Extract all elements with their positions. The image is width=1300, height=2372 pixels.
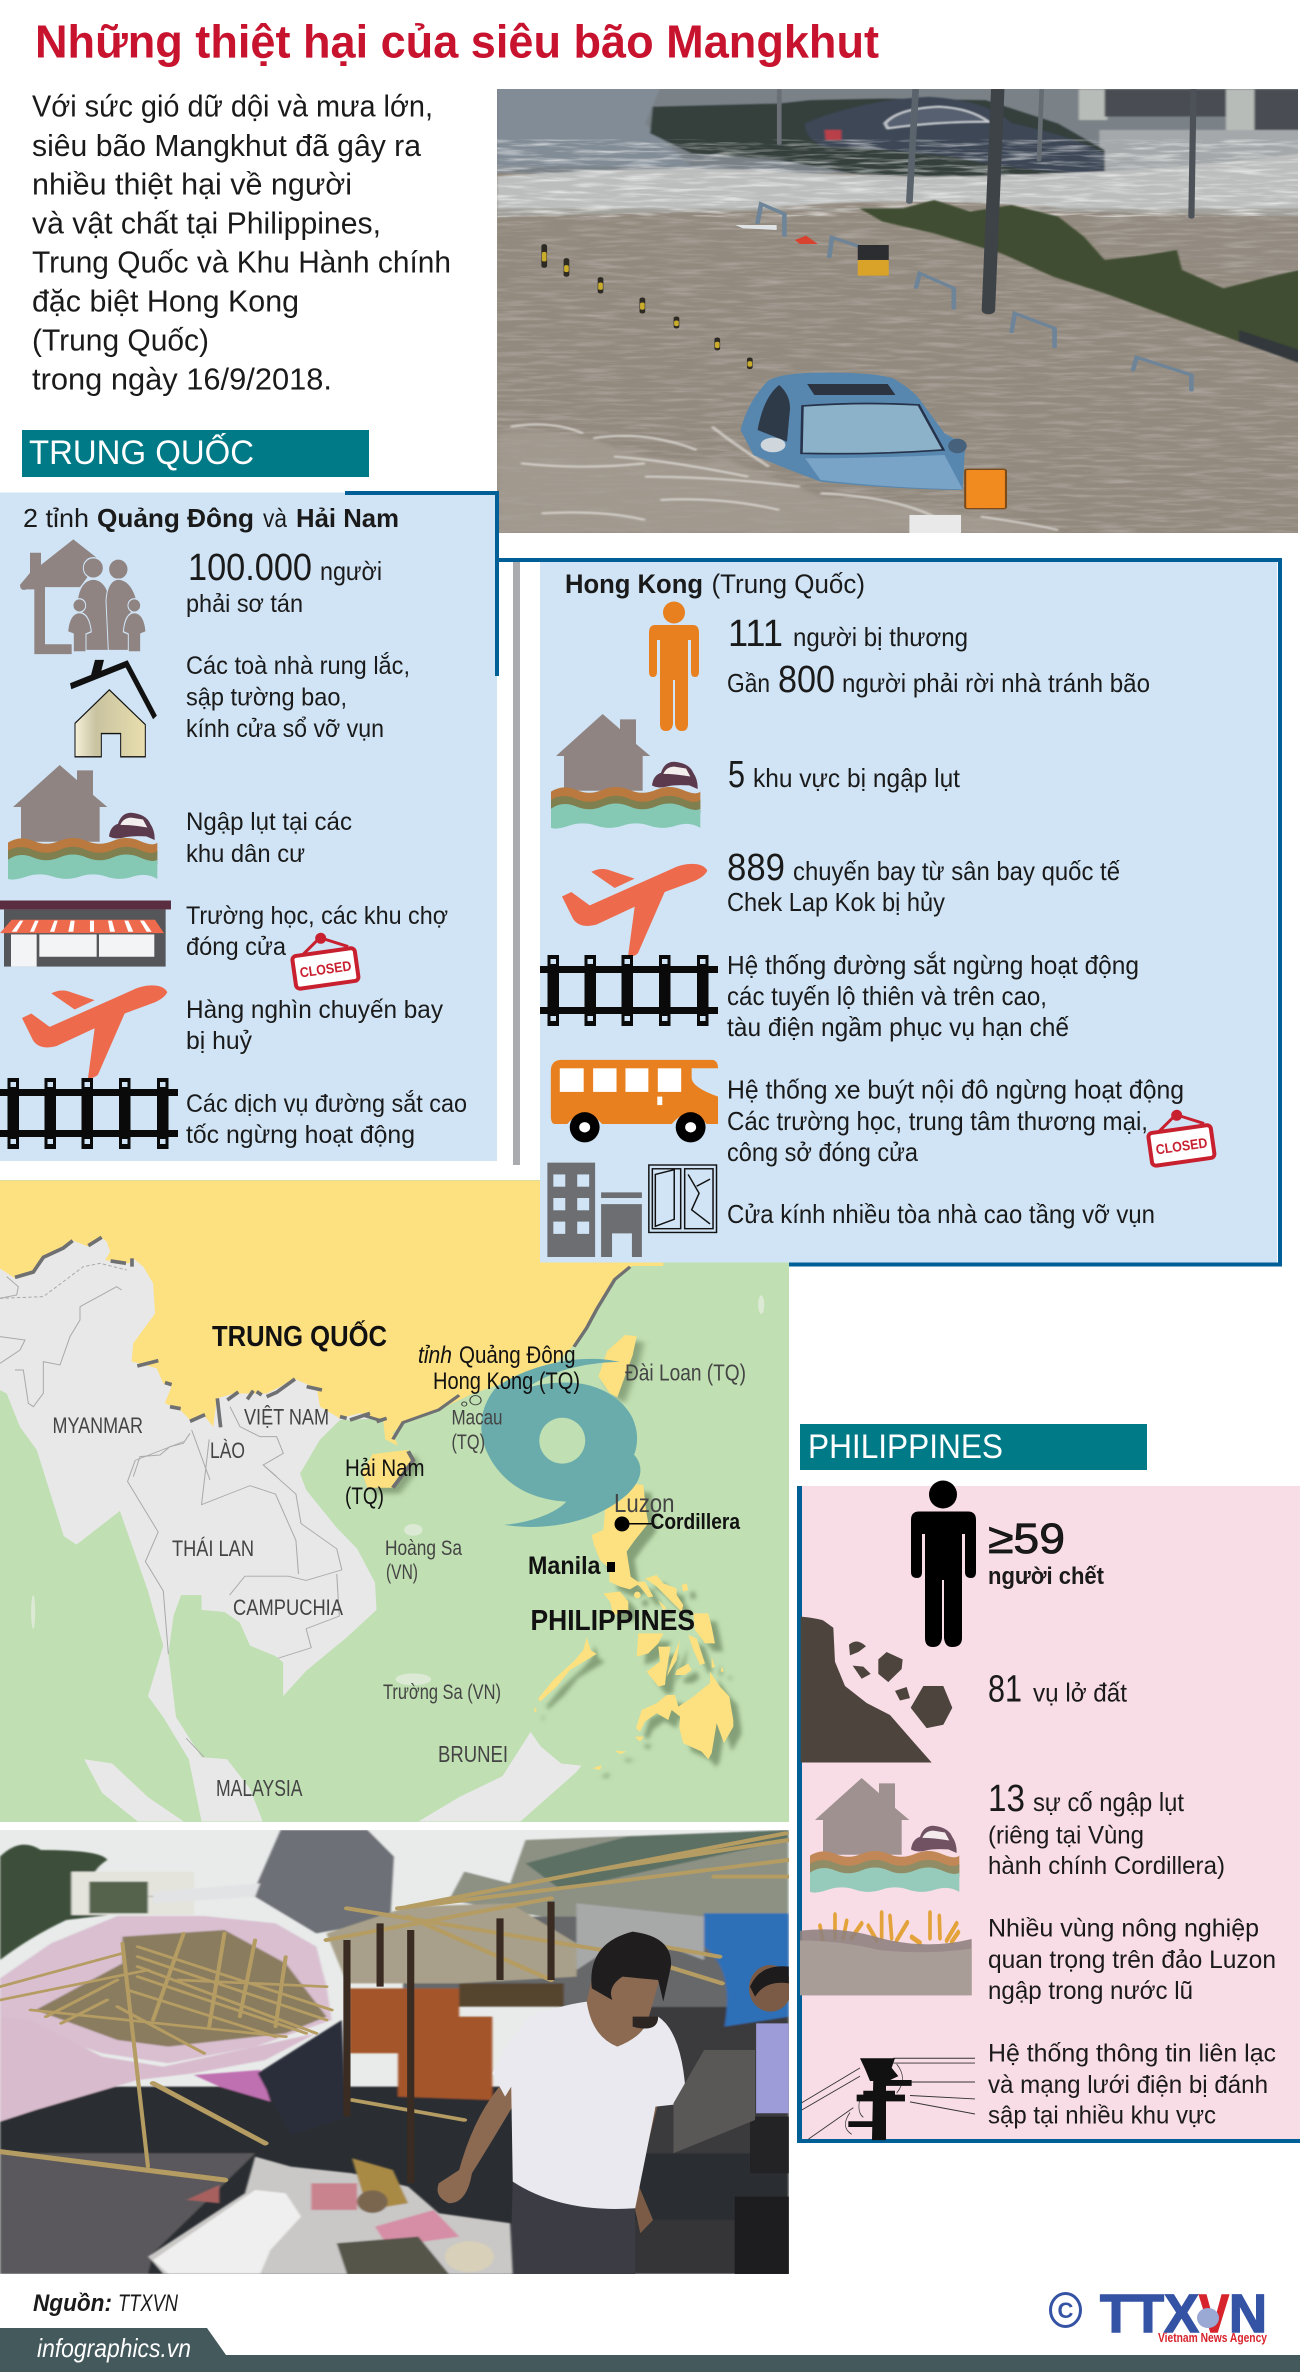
- icon: closed sign: [1145, 1105, 1215, 1166]
- man: [437, 1932, 686, 2274]
- text: communications and power: và mạng lưới điện bị đánh: [988, 2071, 1268, 2099]
- text: rail services: [186, 1089, 467, 1149]
- intro text: nhiều thiệt hại về người: [32, 166, 352, 202]
- text: buses and closures: Các trường học, trung tâm thương mại,: [727, 1106, 1148, 1136]
- icon: landslide: [801, 1617, 952, 1763]
- icon: evacuated family and house: [20, 539, 146, 654]
- map labels: VIỆT NAM: [244, 1404, 329, 1430]
- map labels: Hong Kong (TQ): [433, 1368, 580, 1395]
- text: flooding: [186, 808, 352, 868]
- island: Taiwan: [598, 1335, 637, 1397]
- logo: TTXVN: TTX: [1100, 2284, 1199, 2344]
- text: buses and closures: Hệ thống xe buýt nội đô ngừng hoạt động: [727, 1074, 1184, 1104]
- text: flooding: khu dân cư: [186, 840, 305, 868]
- icon: closed sign: CLOSED: [1155, 1134, 1208, 1157]
- map labels: (TQ): [452, 1431, 485, 1454]
- stat: 111 injured, 800 evacuated: người phải rời nhà tránh bão: [842, 668, 1150, 698]
- land: Southeast Asia mainland: [0, 1212, 388, 1822]
- map labels: Cordillera: [650, 1509, 741, 1534]
- source credit: Nguồn:: [33, 2290, 112, 2317]
- map: South China Sea region: [0, 1180, 789, 1822]
- logo: TTXVN: Vietnam News Agency: [1158, 2331, 1267, 2345]
- marker: Manila: [607, 1562, 615, 1572]
- text: rail services: tốc ngừng hoạt động: [186, 1121, 415, 1149]
- map labels: Manila: [528, 1552, 602, 1580]
- Philippines shadow: [542, 1490, 741, 1778]
- stat: 889 flights cancelled: Chek Lap Kok bị hủy: [727, 887, 945, 917]
- stat: 889 flights cancelled: 889: [727, 847, 785, 889]
- panel heading: Quảng Đông: [97, 503, 254, 533]
- section header: Trung Quốc: [22, 430, 369, 477]
- intro text: đặc biệt Hong Kong: [32, 284, 299, 318]
- island: Hainan: [362, 1450, 413, 1488]
- panel: mainland China impacts: [0, 492, 497, 1161]
- source credit: TTXVN: [118, 2290, 179, 2317]
- panel heading: [565, 569, 865, 599]
- icon: flooded farmland: [800, 1913, 972, 1995]
- stat: 111 injured, 800 evacuated: 111: [728, 613, 783, 655]
- country borders south: [128, 1439, 342, 1757]
- map labels: (TQ): [345, 1483, 384, 1510]
- coast shadow east: [362, 1267, 630, 1439]
- map labels: [52, 1319, 746, 1801]
- stat: 59 dead: ≥59: [988, 1515, 1065, 1563]
- stat: 100.000 evacuated: [186, 547, 382, 618]
- map labels: THÁI LAN: [172, 1536, 254, 1561]
- text: building damage: [186, 651, 410, 743]
- intro text: siêu bão Mangkhut đã gây ra: [32, 128, 422, 163]
- text: closures: đóng cửa: [186, 933, 286, 961]
- stat: 889 flights cancelled: [727, 847, 1120, 917]
- text: buses and closures: [727, 1074, 1184, 1167]
- map labels: Luzon: [614, 1488, 674, 1518]
- text: flooding: Ngập lụt tại các: [186, 808, 352, 836]
- garbage bags: [148, 2157, 513, 2274]
- intro text: Với sức gió dữ dội và mưa lớn,: [32, 89, 433, 124]
- marker: Macau: [462, 1396, 481, 1406]
- intro text: và vật chất tại Philippines,: [32, 206, 381, 240]
- text: communications and power: sập tại nhiều khu vực: [988, 2102, 1216, 2130]
- map labels: TRUNG QUỐC: [212, 1319, 387, 1353]
- intro text: [32, 89, 451, 396]
- icon: orange person: [649, 602, 699, 731]
- section header: Philippines: PHILIPPINES: [808, 1428, 1003, 1466]
- icon: airplane: [562, 864, 707, 957]
- map labels: Hoàng Sa: [385, 1537, 462, 1560]
- text: building damage: sập tường bao,: [186, 684, 347, 712]
- icon: damaged power pylon: [802, 2058, 975, 2140]
- map labels: Trường Sa (VN): [383, 1681, 501, 1704]
- marker: Cordillera: [614, 1516, 652, 1532]
- stat: 5 flooded areas: 5: [728, 754, 745, 796]
- panel heading: và: [263, 503, 287, 533]
- stat: 111 injured, 800 evacuated: [727, 613, 1150, 701]
- logo: TTXVN: C: [1058, 2298, 1074, 2323]
- stat: 100.000 evacuated: người: [320, 556, 382, 586]
- stat: 5 flooded areas: [728, 754, 961, 796]
- stat: 100.000 evacuated: 100.000: [188, 547, 312, 589]
- stat: 13 flood incidents: [988, 1778, 1225, 1880]
- map labels: Macau: [452, 1406, 502, 1430]
- icon: house with broken roof: [71, 660, 155, 757]
- icon: orange bus: [551, 1060, 718, 1142]
- logo: TTXVN: N: [1229, 2284, 1267, 2344]
- icon: flooded house and car: [810, 1778, 959, 1893]
- text: communications and power: [988, 2040, 1276, 2130]
- tree: [0, 1844, 108, 1960]
- icon: flooded house and car: [551, 714, 700, 829]
- stat: 59 dead: [988, 1515, 1104, 1590]
- stat: 13 flood incidents: hành chính Cordillera): [988, 1852, 1225, 1880]
- land: China: [0, 1181, 663, 1446]
- photo: flooded street with cars: [490, 87, 1300, 534]
- stat: 111 injured, 800 evacuated: 800: [778, 659, 835, 701]
- text: building damage: Các toà nhà rung lắc,: [186, 651, 410, 680]
- stat: 13 flood incidents: (riêng tại Vùng: [988, 1822, 1144, 1850]
- stat: 111 injured, 800 evacuated: Gần: [727, 668, 770, 698]
- text: communications and power: Hệ thống thông tin liên lạc: [988, 2040, 1276, 2068]
- text: flights: [186, 996, 443, 1055]
- text: agricultural areas: [988, 1914, 1276, 2005]
- map labels: LÀO: [210, 1438, 245, 1463]
- panel heading: (Trung Quốc): [712, 569, 865, 599]
- map labels: (VN): [386, 1561, 418, 1584]
- text: flights: bị huỷ: [186, 1027, 252, 1055]
- island shadows: [369, 1341, 644, 1494]
- text: agricultural areas: ngập trong nước lũ: [988, 1977, 1193, 2005]
- source credit: [33, 2290, 179, 2317]
- photo: man among typhoon debris: [0, 1830, 792, 2274]
- text: flights: Hàng nghìn chuyến bay: [186, 996, 443, 1024]
- map labels: tỉnh: [418, 1342, 452, 1369]
- icon: black person: [911, 1480, 976, 1647]
- stat: 889 flights cancelled: chuyến bay từ sân bay quốc tế: [793, 856, 1120, 886]
- stat: 111 injured, 800 evacuated: người bị thương: [793, 622, 968, 652]
- icon: closed sign: CLOSED: [299, 957, 352, 980]
- reef dots: [31, 1295, 764, 1685]
- map labels: CAMPUCHIA: [233, 1595, 343, 1620]
- icon: flooded house and car: [8, 765, 157, 880]
- stat: 5 flooded areas: khu vực bị ngập lụt: [753, 763, 961, 793]
- north borders and border shading: [0, 1237, 387, 1480]
- islands: Philippines: [534, 1482, 733, 1770]
- panel heading: 2 tỉnh: [23, 503, 89, 533]
- woman behind: [673, 1965, 792, 2274]
- typhoon eye: [539, 1418, 585, 1464]
- section header: Trung Quốc: TRUNG QUỐC: [29, 433, 254, 472]
- icon: typhoon symbol: [481, 1359, 640, 1527]
- stat: 13 flood incidents: 13: [988, 1778, 1025, 1820]
- text: rail services: Các dịch vụ đường sắt cao: [186, 1089, 467, 1118]
- map labels: PHILIPPINES: [530, 1605, 695, 1637]
- intro text: Trung Quốc và Khu Hành chính: [32, 244, 451, 280]
- text: rail system: tàu điện ngầm phục vụ hạn chế: [727, 1012, 1070, 1042]
- text: closures: Trường học, các khu chợ: [186, 902, 448, 930]
- map labels: Hải Nam: [345, 1455, 424, 1482]
- icon: buildings and broken window: [547, 1163, 717, 1257]
- text: rail system: [727, 950, 1139, 1042]
- logo: TTXVN: V: [1199, 2284, 1229, 2344]
- panel heading: [23, 503, 399, 533]
- icon: railway track: [0, 1078, 178, 1149]
- text: rail system: Hệ thống đường sắt ngừng hoạt động: [727, 950, 1139, 980]
- panel: Philippines impacts: [797, 1480, 1300, 2143]
- map labels: Đài Loan (TQ): [625, 1360, 746, 1386]
- map labels: BRUNEI: [438, 1741, 508, 1767]
- footer bar with site name: infographics.vn: [37, 2333, 191, 2363]
- stat: 13 flood incidents: sự cố ngập lụt: [1033, 1787, 1185, 1817]
- footer bar with site name: [0, 2328, 1300, 2372]
- stat: 59 dead: người chết: [988, 1563, 1104, 1590]
- text: rail system: các tuyến lộ thiên và trên cao,: [727, 981, 1047, 1011]
- land: Sumatra and Borneo: [84, 1732, 582, 1822]
- panel heading: Hải Nam: [296, 503, 399, 533]
- map labels: MALAYSIA: [216, 1775, 303, 1801]
- title: Những thiệt hại của siêu bão Mangkhut: [35, 16, 879, 68]
- map labels: Quảng Đông: [459, 1342, 576, 1369]
- text: agricultural areas: quan trọng trên đảo Luzon: [988, 1946, 1276, 1974]
- logo: TTXVN: [1050, 2284, 1267, 2345]
- icon: railway track: [540, 955, 718, 1026]
- map labels: MYANMAR: [52, 1413, 143, 1438]
- intro text: (Trung Quốc): [32, 322, 209, 358]
- stat: 81 landslides: 81: [988, 1668, 1022, 1710]
- text: building damage: kính cửa sổ vỡ vụn: [186, 715, 384, 743]
- icon: closed market shop: [0, 901, 171, 967]
- icon: airplane: [22, 985, 167, 1078]
- stat: 100.000 evacuated: phải sơ tán: [186, 590, 303, 618]
- text: buses and closures: công sở đóng cửa: [727, 1137, 918, 1167]
- intro text: trong ngày 16/9/2018.: [32, 362, 332, 396]
- panel heading: Hong Kong: [565, 569, 703, 599]
- bamboo poles: [0, 1833, 788, 2180]
- stat: 81 landslides: vụ lở đất: [1033, 1678, 1128, 1708]
- divider: grey vertical bar: [513, 562, 520, 1165]
- text: agricultural areas: Nhiều vùng nông nghiệp: [988, 1914, 1259, 1942]
- stat: 81 landslides: [988, 1668, 1128, 1710]
- icon: closed sign: [289, 928, 359, 989]
- text: closures: [186, 902, 448, 961]
- section header: Philippines: [800, 1424, 1147, 1470]
- panel: Hong Kong impacts: [497, 560, 1280, 1264]
- text: broken windows: Cửa kính nhiều tòa nhà cao tầng vỡ vụn: [727, 1199, 1155, 1229]
